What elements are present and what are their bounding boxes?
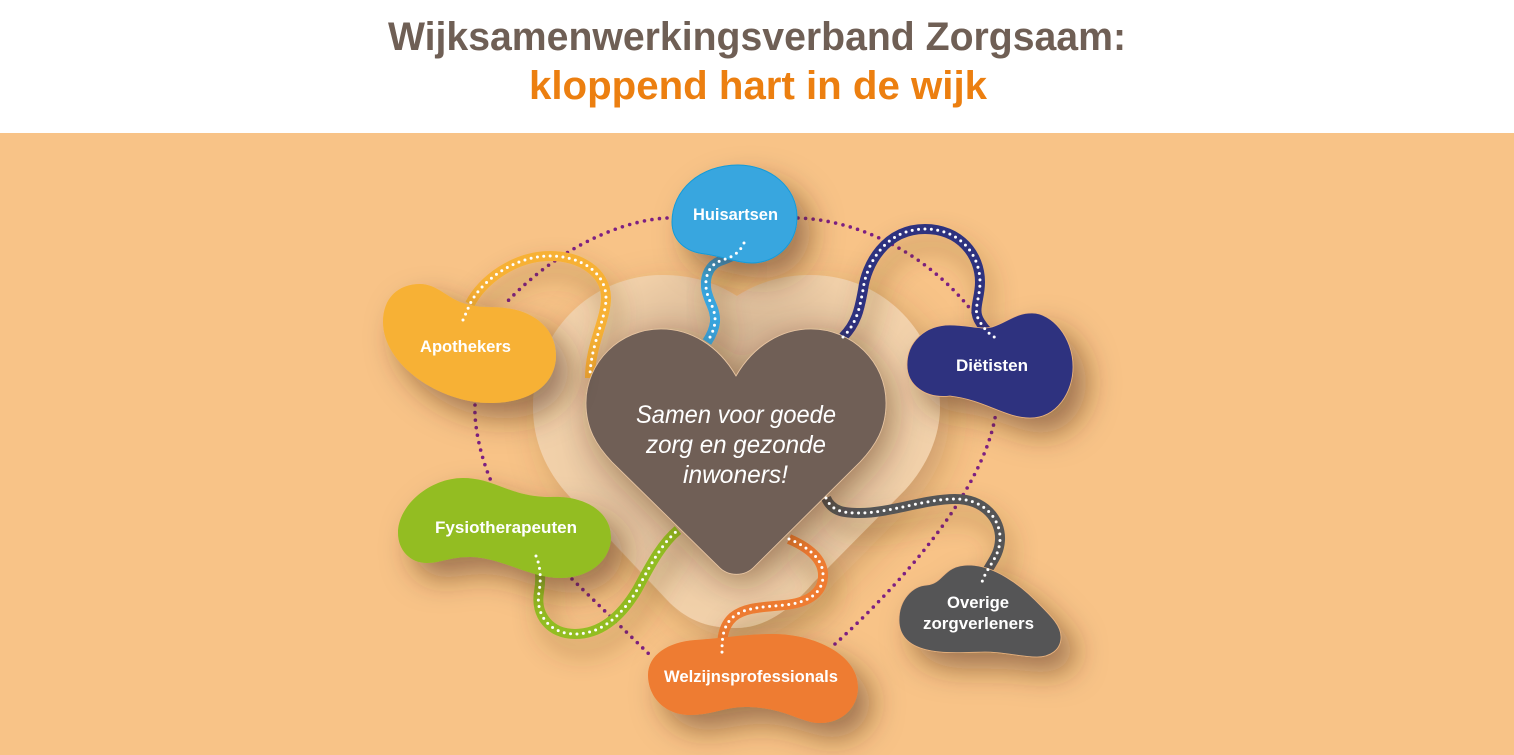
- connector dots: [463, 229, 1000, 654]
- blob: Apothekers: Apothekers: [420, 337, 511, 356]
- blob: Welzijnsprofessionals: Welzijnsprofessionals: [664, 667, 838, 686]
- blob: Overige zorgverleners: Overige: [947, 593, 1009, 612]
- blob: Fysiotherapeuten: Fysiotherapeuten: [435, 518, 577, 537]
- blob: Huisartsen: Huisartsen: [693, 205, 778, 224]
- central heart: Samen voor goede: [636, 401, 836, 429]
- title: Wijksamenwerkingsverband Zorgsaam:: [388, 15, 1126, 59]
- blob: Fysiotherapeuten: [398, 478, 611, 578]
- title: kloppend hart in de wijk: [529, 64, 988, 108]
- title: [388, 15, 1126, 108]
- blob: Overige zorgverleners: zorgverleners: [923, 614, 1034, 633]
- blob: Diëtisten: Diëtisten: [956, 356, 1028, 375]
- blob: Apothekers: [383, 284, 556, 403]
- connector bands: [470, 229, 1000, 654]
- blob: Huisartsen: [672, 165, 797, 263]
- blob: Welzijnsprofessionals: [648, 634, 858, 723]
- central heart: [586, 329, 886, 574]
- blob: Diëtisten: [907, 313, 1073, 418]
- central heart: inwoners!: [683, 461, 788, 489]
- central heart: zorg en gezonde: [645, 431, 826, 459]
- large pale heart: [533, 275, 940, 628]
- dotted heart outline: [475, 218, 996, 657]
- blob: Overige zorgverleners: [899, 565, 1061, 657]
